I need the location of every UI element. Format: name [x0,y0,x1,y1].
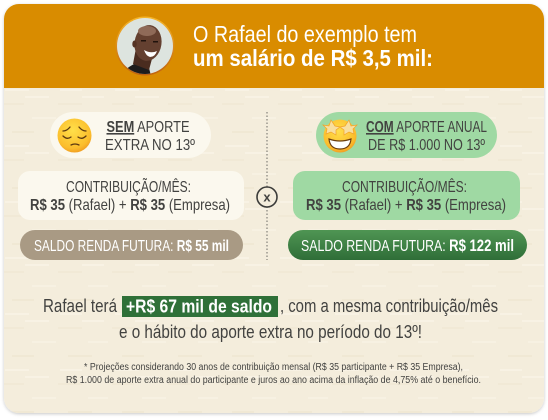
box: contribuição [18,171,244,220]
label: saldo: SALDO RENDA FUTURA: R$ 55 mil [34,238,229,255]
label: saldo: SALDO RENDA FUTURA: R$ 122 mil [301,236,514,255]
bar: saldo [288,230,527,260]
icon: sad emoji [58,118,92,152]
pill: com aporte [316,112,497,158]
divider with x icon [257,112,277,260]
icon: star-struck emoji [323,120,357,152]
text: hábito: e o hábito do aporte extra no período do 13º! [119,321,422,342]
heading line 2: um salário de R$ 3,5 mil: [193,45,433,71]
label: sem aporte line 2: EXTRA NO 13º [105,137,195,154]
panel: header [4,4,544,88]
label: com aporte line 2: DE R$ 1.000 NO 13º [368,137,485,154]
footnote line 2: R$ 1.000 de aporte extra anual do participante e juros ao ano acima da inflação de 4,75% até o benefício. [66,375,481,386]
text: mesma contribuição: , com a mesma contribuição/mês [280,295,498,316]
label: valores: R$ 35 (Rafael) + R$ 35 (Empresa) [306,197,506,214]
box: contribuição [293,171,520,220]
label: contribuição: CONTRIBUIÇÃO/MÊS: [66,176,191,196]
panel: with extra contribution [288,112,527,260]
highlight: mil de saldo: +R$ 67 mil de saldo [126,296,272,316]
pill: sem aporte [50,112,211,158]
text block: conclusion [43,295,498,342]
icon: Rafael portrait [116,16,174,76]
text: rafael terá: Rafael terá [43,295,118,316]
label: sem aporte line 1: SEM APORTE [106,119,189,136]
heading line 1: O Rafael do exemplo tem [193,21,417,47]
label: valores: R$ 35 (Rafael) + R$ 35 (Empresa) [30,197,230,214]
label: contribuição: CONTRIBUIÇÃO/MÊS: [342,176,467,196]
label: com aporte line 1: COM APORTE ANUAL [366,119,487,136]
bar: saldo [20,230,243,260]
divider with x icon: x [263,190,271,204]
panel: without extra contribution [18,112,244,260]
footnote [66,362,481,386]
footnote line 1: * Projeções considerando 30 anos de contribuição mensal (R$ 35 participante + R$ 35 Empresa), [84,362,463,373]
